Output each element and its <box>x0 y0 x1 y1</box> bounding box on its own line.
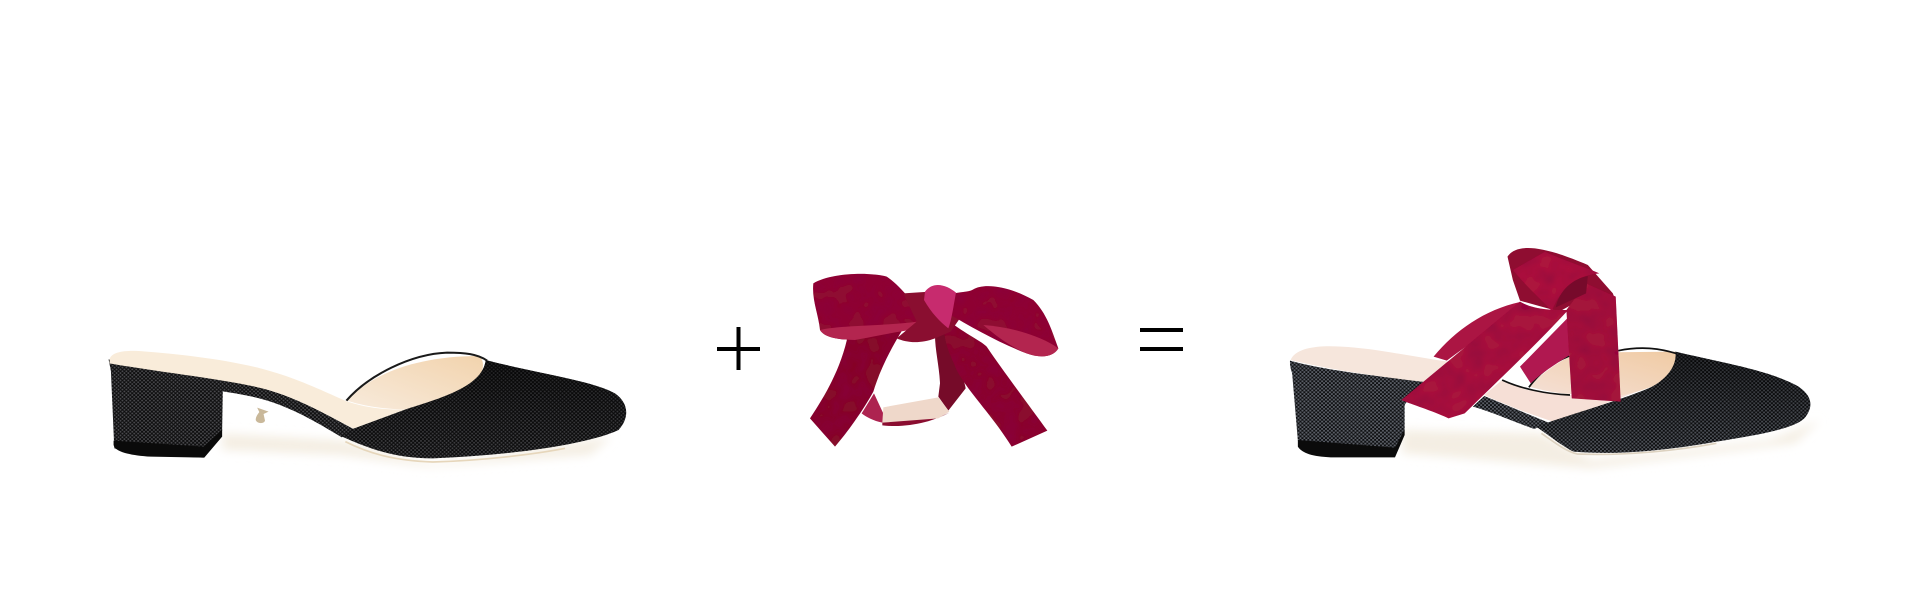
right loop <box>945 286 1058 356</box>
bow loop inside <box>1556 276 1588 307</box>
satin ribbon inner <box>1520 317 1569 383</box>
right ribbon tail <box>1566 283 1621 402</box>
left loop satin <box>820 322 920 340</box>
heel <box>1292 373 1412 448</box>
side band <box>109 359 354 437</box>
toe shading <box>341 360 626 458</box>
shoe shadow <box>222 433 611 467</box>
opening rim <box>1502 348 1676 395</box>
strap inner <box>862 393 884 423</box>
heel sole <box>1298 429 1405 457</box>
insole <box>110 351 406 429</box>
right loop satin <box>983 325 1058 356</box>
bow back loop <box>1507 248 1615 312</box>
toe shading <box>1536 352 1810 453</box>
equals sign <box>1140 328 1183 351</box>
right image: mule with velvet bow tied on <box>1290 248 1820 468</box>
toe upper <box>341 360 626 458</box>
care label <box>882 397 949 423</box>
knot centre <box>897 292 963 342</box>
insole rear <box>1291 346 1456 382</box>
shoe shadow <box>1402 420 1820 468</box>
right tail <box>943 317 1047 447</box>
main ribbon tail <box>1401 302 1568 418</box>
heel <box>111 367 223 458</box>
left image: black textured mule <box>109 351 626 467</box>
heel sole <box>114 429 222 458</box>
foot opening <box>347 356 483 409</box>
knot <box>924 285 956 328</box>
side band rear <box>1290 361 1431 395</box>
insole front <box>1484 380 1641 422</box>
bow front band <box>1513 252 1599 311</box>
back strap <box>935 333 966 411</box>
outsole edge <box>345 442 565 462</box>
toe upper <box>1536 352 1810 453</box>
left tail <box>810 328 903 447</box>
satin ribbon back <box>1434 302 1528 361</box>
charm <box>256 408 269 423</box>
center image: red velvet bow <box>810 274 1058 447</box>
outsole edge <box>1541 433 1716 454</box>
strap bottom <box>882 413 949 426</box>
side band front <box>1473 396 1549 429</box>
left loop <box>813 274 927 340</box>
foot opening <box>1529 352 1676 396</box>
plus sign <box>717 327 760 370</box>
opening rim <box>346 353 487 401</box>
